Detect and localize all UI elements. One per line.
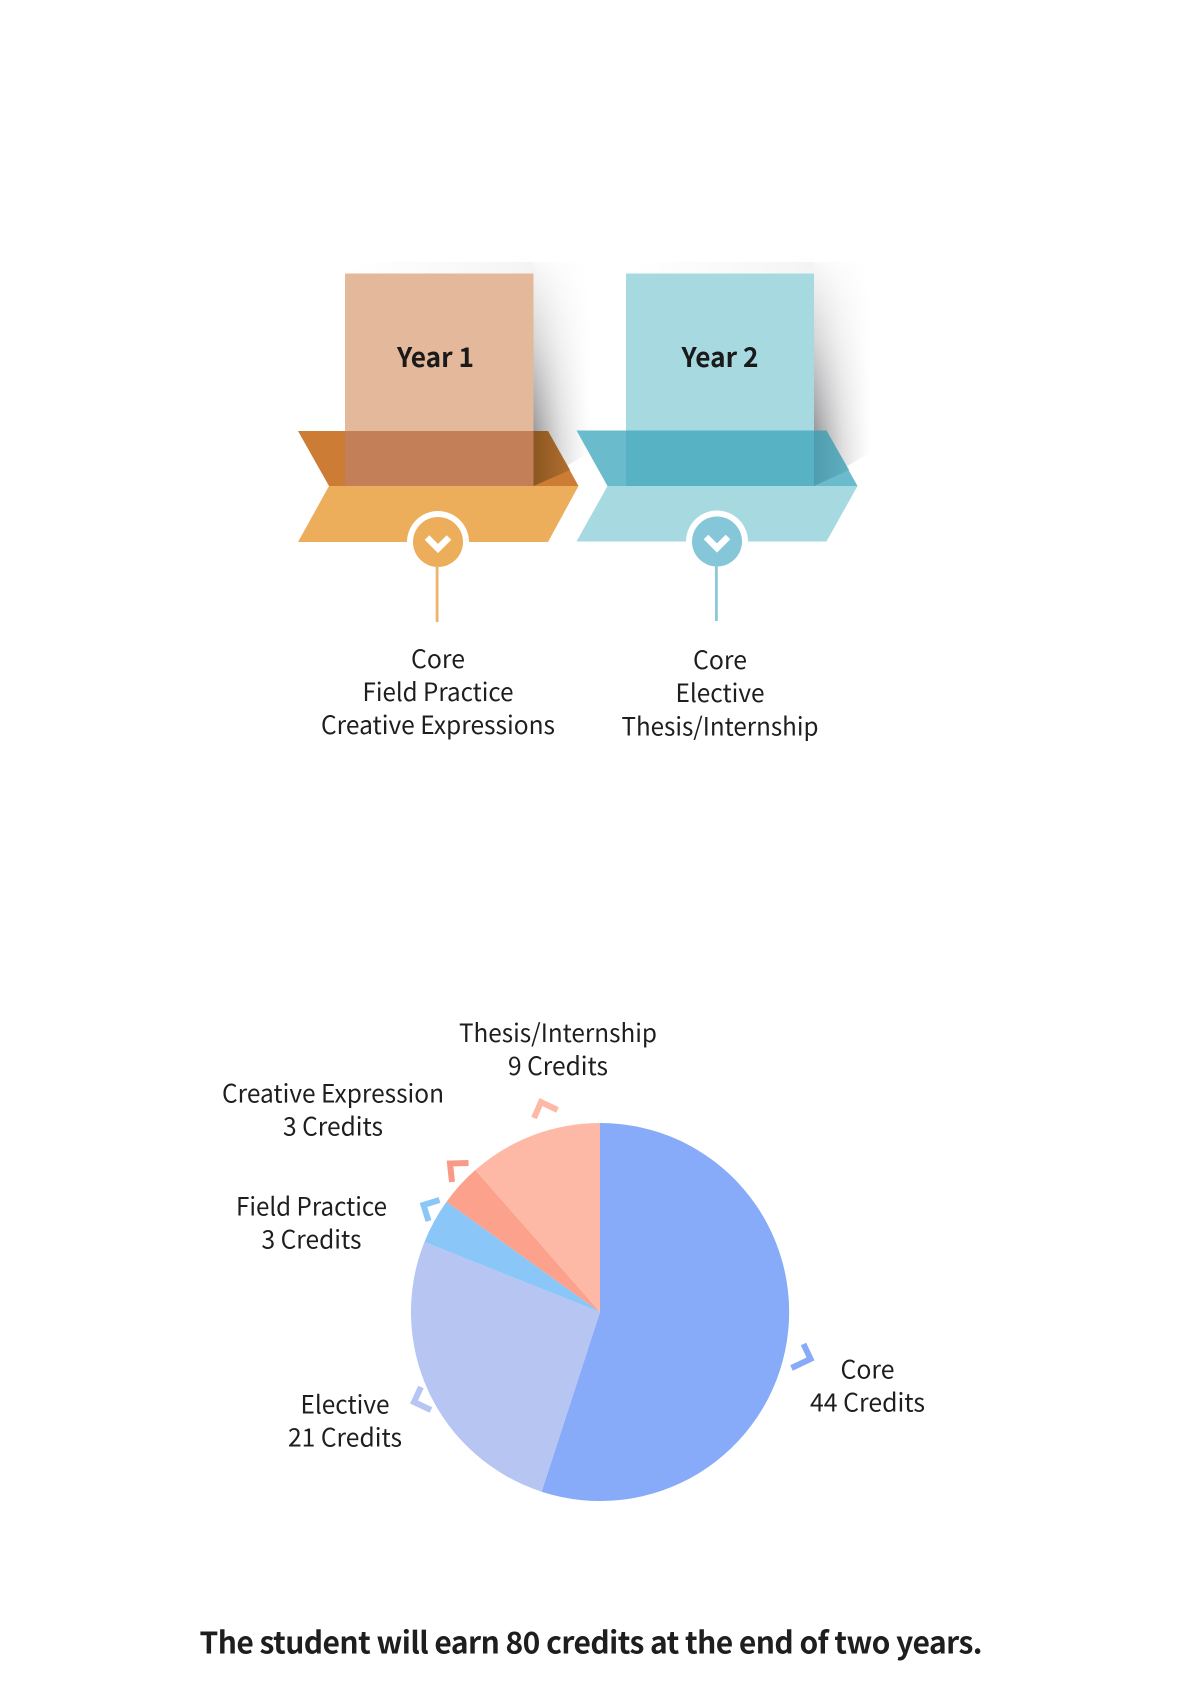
text: Year 2 courses: Core xyxy=(693,641,747,677)
text: Year 1 courses: Creative Expressions xyxy=(321,706,555,742)
label: Year 2: Year 2 xyxy=(681,336,758,375)
text: Year 1 courses: Field Practice xyxy=(362,673,514,709)
text: Year 2 courses xyxy=(622,641,818,744)
ribbon overlap: Year 1 xyxy=(345,431,534,486)
label: Creative Expression xyxy=(222,1074,444,1144)
ribbon: Year 2 back fold xyxy=(576,430,858,486)
slice: Core xyxy=(542,1123,789,1501)
panel: Year 2 ribbon xyxy=(576,262,871,744)
label: Field Practice xyxy=(236,1188,387,1256)
label: Thesis/Internship: 9 Credits xyxy=(508,1047,608,1083)
label: Creative Expression: Creative Expression xyxy=(222,1074,444,1110)
label: Year 1: Year 1 xyxy=(396,336,474,375)
tick: Core xyxy=(792,1344,810,1368)
text: Year 2 courses: Thesis/Internship xyxy=(622,708,818,744)
slice: Elective xyxy=(411,1242,600,1492)
ribbon overlap: Year 2 xyxy=(626,430,814,486)
label: Thesis/Internship xyxy=(459,1014,657,1083)
shadow: Year 1 card xyxy=(489,262,580,466)
text: Year 1 courses xyxy=(321,640,555,742)
label: Elective: 21 Credits xyxy=(288,1418,402,1454)
card: Year 1 xyxy=(345,274,534,486)
label: Elective xyxy=(288,1386,402,1454)
tick: Elective xyxy=(414,1387,431,1410)
label: Core: Core xyxy=(840,1350,894,1386)
ribbon shadow: Year 2 xyxy=(814,430,849,486)
slice: Thesis/Internship xyxy=(475,1123,600,1312)
tick: Creative Expression xyxy=(450,1163,468,1182)
card: Year 2 xyxy=(626,274,814,486)
label: Core: 44 Credits xyxy=(810,1384,925,1420)
icon: Year 1 chevron badge xyxy=(407,511,469,573)
summary statement: The student will earn 80 credits at the end of two years. xyxy=(200,1618,982,1662)
connector: Year 1 xyxy=(436,566,438,622)
label: Thesis/Internship: Thesis/Internship xyxy=(459,1014,657,1050)
label: Field Practice: Field Practice xyxy=(236,1188,387,1224)
label: Field Practice: 3 Credits xyxy=(262,1220,362,1256)
tick: Thesis/Internship xyxy=(534,1102,558,1118)
label: Core xyxy=(810,1350,925,1420)
ribbon shadow: Year 1 xyxy=(534,431,570,486)
text: Year 1 courses: Core xyxy=(411,640,465,676)
pie chart: credits by category xyxy=(411,1123,789,1501)
ribbon: Year 1 front fold xyxy=(298,486,578,542)
icon: Year 2 chevron badge xyxy=(686,510,748,572)
ribbon: Year 1 back fold xyxy=(298,431,578,486)
label: Creative Expression: 3 Credits xyxy=(283,1108,383,1144)
slice: Creative Expression xyxy=(446,1170,600,1312)
ribbon: Year 2 front fold xyxy=(576,486,858,542)
label: Elective: Elective xyxy=(300,1386,390,1422)
text: Year 2 courses: Elective xyxy=(676,674,764,710)
panel: Year 1 ribbon xyxy=(298,262,590,742)
shadow: Year 2 card xyxy=(770,262,862,466)
connector: Year 2 xyxy=(715,566,718,621)
tick: Field Practice xyxy=(424,1200,440,1221)
slice: Field Practice xyxy=(424,1202,600,1312)
